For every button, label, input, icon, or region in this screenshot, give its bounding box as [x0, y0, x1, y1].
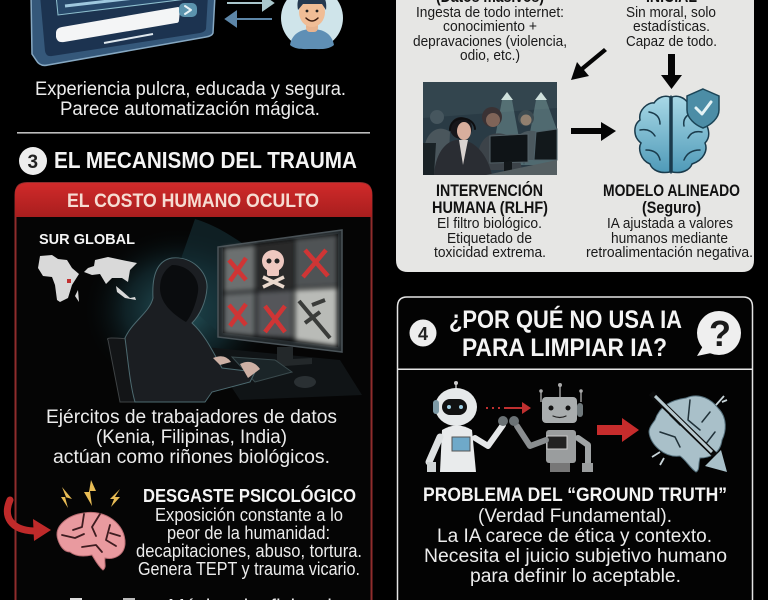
- panel: tablet and user illustration: [31, 0, 343, 65]
- text: big data: Ingesta de todo internet:: [416, 5, 564, 21]
- text: initial model: [626, 0, 717, 50]
- text: data worker armies: (Kenia, Filipinas, India): [96, 427, 287, 448]
- text: ground truth problem: (Verdad Fundamental).: [478, 506, 672, 527]
- text: aligned model: MODELO ALINEADO: [603, 182, 740, 200]
- illustration: white robot: [427, 381, 508, 472]
- text: big data: conocimiento +: [443, 19, 537, 35]
- text: human intervention: INTERVENCIÓN: [436, 181, 543, 200]
- icon: user avatar: [281, 0, 343, 49]
- icon: question bubble: [697, 311, 741, 356]
- text: cut-off next item: [70, 596, 344, 600]
- text: psychological wear: Exposición constante a lo: [155, 505, 343, 525]
- icon: aligned brain with shield: [635, 89, 719, 173]
- text: human intervention: El filtro biológico.: [437, 216, 542, 232]
- heading: section 3: EL MECANISMO DEL TRAUMA: [54, 147, 357, 173]
- text: ground truth problem: para definir lo aceptable.: [470, 566, 681, 587]
- heading: section 3: 3: [28, 152, 38, 173]
- text: aligned model: humanos mediante: [611, 231, 728, 247]
- panel header: [15, 183, 372, 217]
- panel header: EL COSTO HUMANO OCULTO: [67, 191, 319, 212]
- text: aligned model: IA ajustada a valores: [607, 216, 733, 232]
- text: big data: [413, 0, 567, 64]
- text: experience description: [35, 79, 346, 120]
- heading: section 4: 4: [418, 324, 428, 344]
- illustration: hooded worker at monitor: [80, 219, 362, 402]
- icon: question bubble: ?: [709, 313, 731, 354]
- text: psychological wear: peor de la humanidad:: [167, 523, 330, 543]
- icon: tablet with chat: [31, 0, 215, 65]
- text: psychological wear: Genera TEPT y trauma vicario.: [138, 559, 360, 579]
- label: Sur Global: SUR GLOBAL: [39, 231, 135, 248]
- text: ground truth problem: La IA carece de ética y contexto.: [437, 526, 712, 547]
- text: big data: odio, etc.): [460, 48, 520, 64]
- text: data worker armies: Ejércitos de trabajadores de datos: [46, 407, 337, 428]
- text: data worker armies: actúan como riñones biológicos.: [53, 447, 330, 468]
- arrow: diagonal to human intervention: [571, 48, 607, 80]
- text: human intervention: [432, 181, 548, 261]
- text: aligned model: (Seguro): [642, 199, 701, 217]
- arrow: dotted red between robots: [486, 402, 531, 414]
- text: ground truth problem: [423, 485, 727, 587]
- icon: world map: [38, 255, 137, 302]
- text: ground truth problem: Necesita el juicio subjetivo humano: [424, 546, 727, 567]
- heading: section 4: ¿POR QUÉ NO USA IA: [449, 305, 682, 334]
- text: big data: depravaciones (violencia,: [413, 34, 567, 50]
- text: human intervention: toxicidad extrema.: [434, 245, 546, 261]
- text: psychological wear: DESGASTE PSICOLÓGICO: [143, 485, 356, 506]
- illustration: workers: [423, 82, 557, 175]
- text: aligned model: retroalimentación negativa.: [586, 245, 753, 261]
- panel: hidden human cost: [7, 183, 372, 600]
- panel: RLHF process: [396, 0, 754, 272]
- arrow: to user: [227, 0, 273, 10]
- panel: why not use AI: [397, 297, 753, 600]
- text: initial model: Capaz de todo.: [626, 34, 717, 50]
- heading: section 4: [410, 305, 682, 362]
- arrow: from user: [226, 12, 272, 26]
- text: data worker armies: [46, 407, 337, 468]
- arrow: red to broken brain: [597, 418, 639, 442]
- icon: stressed brain: [57, 480, 125, 570]
- text: initial model: Sin moral, solo: [626, 5, 716, 21]
- text: ground truth problem: PROBLEMA DEL “GROUND TRUTH”: [423, 485, 727, 506]
- arrow: red curved: [7, 500, 51, 541]
- arrow: down to aligned model: [661, 54, 682, 89]
- text: human intervention: Etiquetado de: [447, 231, 532, 247]
- arrow: to aligned model: [571, 122, 616, 141]
- text: psychological wear: [136, 485, 362, 579]
- text: psychological wear: decapitaciones, abuso, tortura.: [136, 541, 362, 561]
- text: experience description: Experiencia pulcra, educada y segura.: [35, 79, 346, 100]
- text: human intervention: HUMANA (RLHF): [432, 199, 548, 217]
- illustration: grey robot: [509, 383, 593, 472]
- text: aligned model: [586, 182, 753, 261]
- text: initial model: estadísticas.: [633, 19, 710, 35]
- text: experience description: Parece automatización mágica.: [60, 99, 320, 120]
- icon: broken brain: [649, 393, 727, 472]
- heading: section 4: PARA LIMPIAR IA?: [462, 334, 667, 362]
